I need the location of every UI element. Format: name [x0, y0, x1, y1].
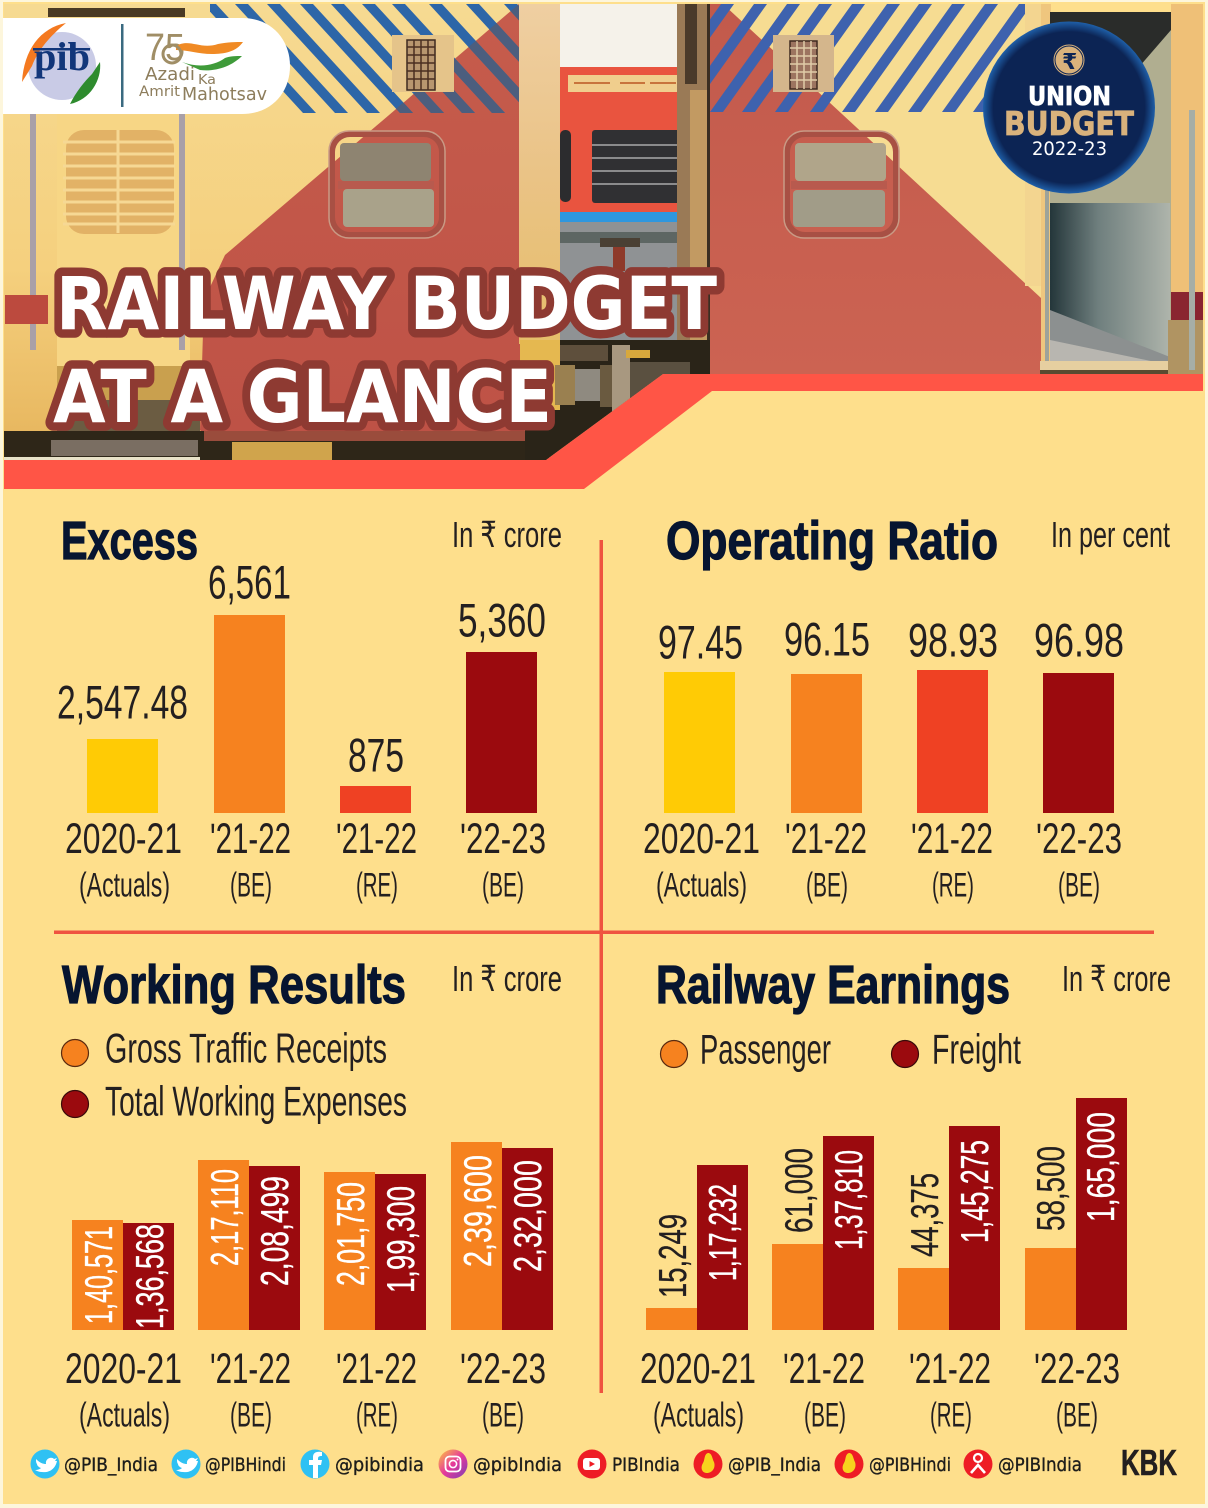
bar chart: Excess: (BE): [482, 866, 524, 904]
bar chart: Operating Ratio: 97.45: [658, 616, 743, 668]
bar chart: Working Results: 1,36,568: [129, 1224, 172, 1329]
panel: Excess: [57, 511, 562, 904]
legend: Working Results: [62, 1024, 407, 1124]
bar chart: Working Results: 1,99,300: [380, 1186, 423, 1293]
heading: Excess: Excess: [61, 511, 198, 571]
photo: train carriages: [4, 4, 1203, 465]
bar chart: Excess: 875: [348, 728, 404, 782]
coupling column: [677, 4, 707, 340]
bar chart: Working Results: (Actuals): [79, 1396, 170, 1434]
heading: Railway Earnings: Railway Earnings: [656, 955, 1010, 1015]
footer: social handles: PIBIndia: [612, 1454, 680, 1476]
bar chart: Excess: 2020-21: [65, 815, 182, 863]
bar chart: Excess: 5,360: [458, 594, 546, 646]
icon: Instagram: [438, 1450, 468, 1478]
bar chart: Operating Ratio: 96.98: [1034, 614, 1124, 666]
icon: ShareChat: [964, 1450, 992, 1478]
bar chart: Operating Ratio: '21-22: [785, 815, 867, 863]
icon: Azadi Ka Amrit Mahotsav logo: Amrit: [139, 84, 181, 100]
icon: Azadi Ka Amrit Mahotsav logo: Mahotsav: [182, 84, 267, 105]
bar chart: Railway Earnings: '21-22: [783, 1345, 865, 1393]
louvre vent: [66, 130, 174, 234]
icon: YouTube: [578, 1450, 606, 1478]
bar chart: Railway Earnings: (BE): [804, 1396, 846, 1434]
legend: Railway Earnings: Passenger: [700, 1026, 831, 1072]
footer: social handles: @pibindia: [335, 1454, 424, 1476]
bar chart: Railway Earnings: 61,000: [778, 1148, 821, 1233]
bar chart: Railway Earnings: 1,65,000: [1080, 1112, 1123, 1222]
unit label: In ₹ crore: [452, 514, 562, 555]
bar chart: Working Results: (RE): [356, 1396, 398, 1434]
bar chart: Operating Ratio: (BE): [806, 866, 848, 904]
bar chart: Working Results: 2,01,750: [330, 1182, 373, 1286]
bar chart: Excess: [57, 556, 546, 904]
bar chart: Working Results: (BE): [482, 1396, 524, 1434]
badge: Union Budget 2022-23: UNION: [1028, 82, 1111, 112]
bar chart: Working Results: '21-22: [336, 1345, 417, 1393]
icon: Twitter: [30, 1450, 60, 1478]
bar chart: Excess: (Actuals): [79, 866, 170, 904]
badge: Union Budget 2022-23: ₹: [1062, 50, 1077, 75]
bar chart: Operating Ratio: [643, 612, 1124, 904]
title: AT A GLANCE: [53, 355, 552, 440]
bar chart: Excess: 6,561: [208, 556, 291, 608]
bar chart: Operating Ratio: '21-22: [911, 815, 993, 863]
right carriage yellow body: [710, 4, 1050, 374]
bar chart: Railway Earnings: 2020-21: [640, 1345, 756, 1393]
bar chart: Working Results: '21-22: [210, 1345, 291, 1393]
right vent: [773, 35, 834, 92]
footer: social handles: [30, 1450, 1082, 1478]
bar chart: Working Results: [65, 1142, 553, 1434]
left vent: [392, 35, 454, 92]
legend: Railway Earnings: [660, 1026, 1021, 1072]
bar chart: Railway Earnings: '22-23: [1034, 1345, 1120, 1393]
footer: social handles: @PIBIndia: [998, 1454, 1082, 1476]
centre gap: [519, 4, 560, 344]
title: RAILWAY BUDGET: [56, 262, 717, 347]
bar chart: Operating Ratio: 98.93: [908, 614, 998, 666]
icon: Azadi Ka Amrit Mahotsav logo: [139, 27, 267, 105]
bar chart: Railway Earnings: '21-22: [909, 1345, 991, 1393]
logo panel: PIB and Azadi Ka Amrit Mahotsav: [3, 18, 290, 114]
title: [53, 262, 717, 440]
icon: Azadi Ka Amrit Mahotsav logo: Ka: [198, 73, 216, 88]
icon: Koo: [694, 1450, 722, 1478]
heading: Operating Ratio: Operating Ratio: [666, 511, 998, 571]
footer: social handles: @PIB_India: [64, 1454, 158, 1476]
icon: Azadi Ka Amrit Mahotsav logo: Azadi: [145, 64, 195, 85]
icon: Azadi Ka Amrit Mahotsav logo: 75: [145, 27, 185, 69]
footer: social handles: @pibIndia: [473, 1454, 562, 1476]
bar chart: Working Results: 2,32,000: [507, 1160, 550, 1272]
icon: PIB emblem: pib: [34, 34, 90, 79]
icon: Twitter Hindi: [172, 1450, 200, 1478]
bar chart: Excess: (BE): [230, 866, 272, 904]
bar chart: Excess: '22-23: [460, 815, 546, 863]
bar chart: Railway Earnings: 44,375: [904, 1173, 947, 1257]
bar chart: Working Results: 2,08,499: [254, 1176, 297, 1286]
badge: Union Budget 2022-23: BUDGET: [1004, 104, 1134, 143]
left window: [329, 131, 445, 238]
right window: [784, 131, 899, 238]
bar chart: Railway Earnings: (BE): [1056, 1396, 1098, 1434]
unit label: In ₹ crore: [452, 958, 562, 999]
bar chart: Railway Earnings: 1,37,810: [828, 1150, 871, 1250]
bar chart: Excess: 2,547.48: [57, 676, 188, 728]
bar chart: Excess: '21-22: [336, 815, 417, 863]
left carriage yellow body: [4, 4, 524, 444]
footer: social handles: @PIBHindi: [205, 1454, 286, 1476]
bar chart: Working Results: 2,17,110: [204, 1169, 247, 1266]
underframe: [4, 431, 549, 460]
bogie machinery: [525, 340, 710, 465]
icon: Facebook: [300, 1450, 330, 1478]
bar chart: Operating Ratio: 96.15: [784, 612, 870, 666]
panel: Railway Earnings: [640, 955, 1171, 1434]
legend: Working Results: Total Working Expenses: [105, 1078, 407, 1124]
bar chart: Railway Earnings: (RE): [930, 1396, 972, 1434]
open door right: [1025, 283, 1028, 286]
credit: KBK: KBK: [1121, 1442, 1177, 1483]
legend: Railway Earnings: Freight: [932, 1026, 1021, 1072]
bar chart: Railway Earnings: (Actuals): [653, 1396, 744, 1434]
badge: Union Budget 2022-23: 2022-23: [1032, 138, 1107, 160]
bar chart: Operating Ratio: (Actuals): [656, 866, 747, 904]
red ribbon band: [4, 374, 1203, 489]
panel: Working Results: [62, 955, 562, 1434]
bar chart: Operating Ratio: (BE): [1058, 866, 1100, 904]
bar chart: Railway Earnings: 1,17,232: [702, 1184, 745, 1281]
footer: social handles: @PIBHindi: [869, 1454, 951, 1476]
icon: Koo Hindi: [834, 1450, 864, 1478]
right stripes: [710, 4, 1025, 112]
bar chart: Railway Earnings: 15,249: [652, 1214, 695, 1298]
destination sign: [568, 75, 680, 92]
bar chart: Working Results: '22-23: [460, 1345, 546, 1393]
bar chart: Railway Earnings: 1,45,275: [954, 1140, 997, 1243]
bar chart: Working Results: 2,39,600: [457, 1155, 500, 1267]
bar chart: Operating Ratio: '22-23: [1036, 815, 1122, 863]
left stripes: [210, 4, 519, 113]
legend: Working Results: Gross Traffic Receipts: [105, 1024, 387, 1072]
panel: Operating Ratio: [643, 511, 1170, 904]
red body left: [200, 4, 525, 440]
badge: Union Budget 2022-23: [983, 22, 1155, 194]
bar chart: Excess: (RE): [356, 866, 398, 904]
heading: Working Results: Working Results: [62, 955, 406, 1015]
bar chart: Railway Earnings: [640, 1098, 1127, 1434]
bar chart: Operating Ratio: 2020-21: [643, 815, 760, 863]
bar chart: Working Results: 2020-21: [65, 1345, 182, 1393]
bar chart: Operating Ratio: (RE): [932, 866, 974, 904]
bar chart: Excess: '21-22: [210, 815, 291, 863]
bar chart: Working Results: 1,40,571: [78, 1226, 121, 1324]
footer: social handles: @PIB_India: [728, 1454, 821, 1476]
bar chart: Railway Earnings: 58,500: [1030, 1146, 1073, 1231]
icon: PIB emblem: [22, 23, 100, 104]
bar chart: Working Results: (BE): [230, 1396, 272, 1434]
